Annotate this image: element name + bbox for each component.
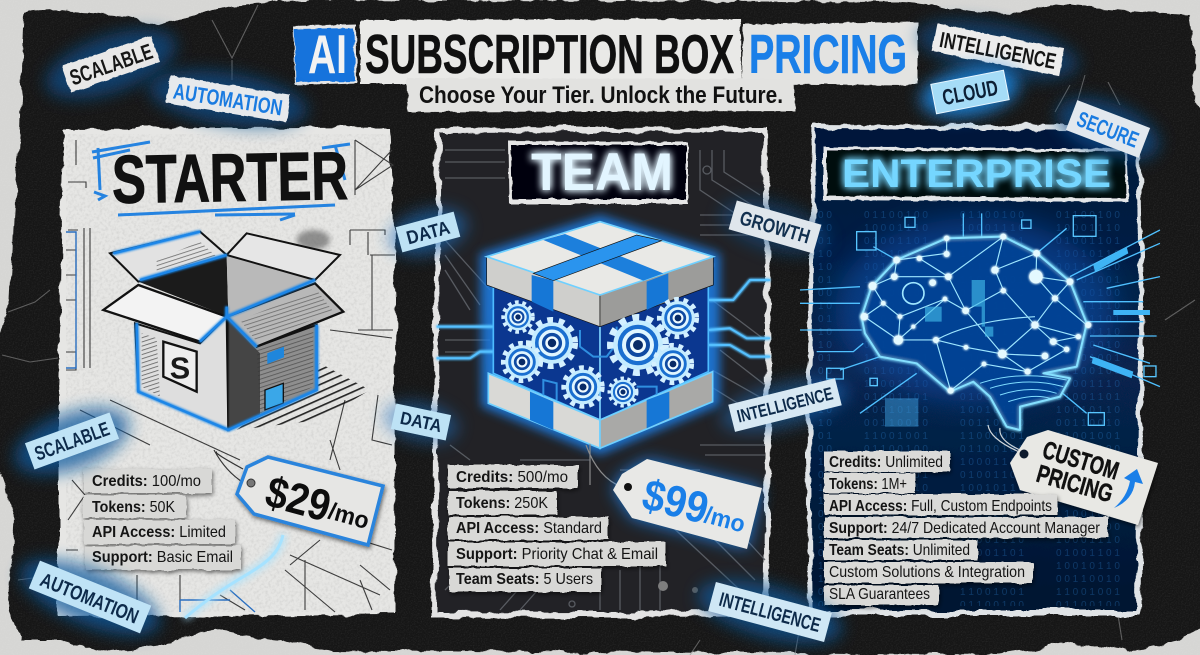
- price tag: custom pricing: [988, 425, 1158, 525]
- floating keyword: INTELLIGENCE lower: [692, 568, 848, 655]
- panel: enterprise: [800, 124, 1160, 616]
- floating keyword: GROWTH: [715, 188, 835, 266]
- floating keyword: GROWTH: GROWTH: [737, 207, 812, 248]
- title banner: [293, 19, 918, 112]
- binary rain background: [818, 206, 1134, 606]
- price tag: custom pricing: CUSTOM: [1039, 436, 1122, 486]
- box body: [493, 285, 708, 420]
- team feature list: Credits: 500/mo: [456, 469, 568, 486]
- team circuit board lines: [445, 150, 765, 610]
- team feature list: Team Seats: 5 Users: [456, 571, 593, 588]
- floating keyword: SCALABLE top: SCALABLE: [66, 39, 156, 90]
- floating keyword: DATA upper: DATA: [404, 218, 453, 249]
- icon: open sketched box: [103, 230, 370, 430]
- enterprise paper edge: [806, 124, 1144, 616]
- arrow: upward blue: [1114, 469, 1143, 508]
- floating keyword: SECURE: SECURE: [1073, 106, 1142, 153]
- heading: STARTER: [92, 138, 350, 220]
- box left wall: [135, 317, 228, 430]
- starter feature list: Credits: 100/mo: [92, 473, 201, 490]
- title: AI: AI: [308, 23, 347, 85]
- team feature list: Support: Priority Chat & Email: [456, 546, 658, 563]
- floating keyword: INTELLIGENCE middle: INTELLIGENCE: [735, 383, 835, 427]
- enterprise feature list: Custom Solutions & Integration: [829, 564, 1025, 581]
- title: SUBSCRIPTION BOX: SUBSCRIPTION BOX: [365, 23, 734, 85]
- starter feature list: Tokens: 50K: [92, 499, 175, 516]
- heading: ENTERPRISE: ENTERPRISE: [842, 152, 1111, 196]
- floating keyword: INTELLIGENCE middle: [716, 368, 854, 442]
- enterprise navy panel: [811, 129, 1139, 610]
- heading: ENTERPRISE: [823, 147, 1129, 202]
- box S label: [163, 342, 197, 392]
- enterprise feature list: Support: 24/7 Dedicated Account Manager: [829, 520, 1101, 537]
- enterprise feature list: SLA Guarantees: [829, 586, 930, 603]
- starter paper: [58, 127, 396, 617]
- brain outline: [862, 237, 1087, 430]
- floating keyword: DATA lower: DATA: [398, 408, 444, 436]
- enterprise feature list: API Access: Full, Custom Endpoints: [829, 498, 1052, 515]
- brain network links: [864, 237, 1087, 391]
- box blue accents: [265, 383, 283, 410]
- floating keyword: CLOUD: [916, 59, 1024, 125]
- floating keyword: INTELLIGENCE lower: INTELLIGENCE: [717, 589, 823, 637]
- starter feature list: API Access: Limited: [92, 524, 226, 541]
- team feature list: Tokens: 250K: [456, 495, 548, 512]
- enterprise feature list: Credits: Unlimited: [829, 454, 943, 471]
- brain nodes: [861, 234, 1091, 394]
- starter paper texture: [66, 134, 390, 612]
- team feature list: [448, 465, 666, 592]
- title: PRICING: PRICING: [749, 23, 907, 85]
- box interior: [138, 255, 228, 317]
- floating keyword: DATA upper: [384, 200, 472, 264]
- box tray: [488, 373, 600, 448]
- floating keyword: AUTOMATION lower: AUTOMATION: [37, 569, 142, 629]
- box S label: S: [170, 351, 190, 385]
- floating keyword: SCALABLE top: [38, 15, 184, 113]
- floating keyword: INTELLIGENCE top: INTELLIGENCE: [938, 27, 1058, 74]
- team feature list: API Access: Standard: [456, 520, 602, 537]
- light streak: [185, 535, 283, 618]
- data lines: [437, 280, 770, 358]
- box gears: [504, 300, 696, 405]
- price tag: $99/mo: /mo: [701, 502, 748, 538]
- price tag: $99/mo: [586, 444, 762, 549]
- price tag: $29/mo: [214, 450, 383, 545]
- price tag: $29/mo: $29: [260, 467, 336, 531]
- enterprise feature list: [824, 451, 1108, 605]
- box back flaps: [110, 232, 227, 282]
- floating keyword: AUTOMATION top: [145, 61, 311, 137]
- starter feature list: Support: Basic Email: [92, 549, 233, 566]
- box right wall: [228, 318, 317, 430]
- box lid: [487, 257, 600, 327]
- panel: starter: [58, 127, 396, 618]
- icon: glowing box with gears: [437, 215, 770, 455]
- price tag: $99/mo: $99: [638, 470, 713, 534]
- box glow: [480, 215, 720, 455]
- floating keyword: AUTOMATION top: AUTOMATION: [172, 79, 284, 120]
- data streams: [800, 213, 1160, 413]
- enterprise feature list: Team Seats: Unlimited: [829, 542, 970, 559]
- title: SUBSCRIPTION BOX: [360, 19, 742, 85]
- brain glow: [835, 218, 1115, 402]
- floating keyword: INTELLIGENCE top: [913, 9, 1083, 91]
- enterprise feature list: Tokens: 1M+: [829, 476, 907, 493]
- heading: TEAM: TEAM: [531, 143, 673, 202]
- panel: team: [432, 127, 771, 618]
- heading: STARTER: STARTER: [111, 138, 349, 218]
- box ground shadow: [237, 363, 370, 430]
- subtitle: Choose Your Tier. Unlock the Future.: [419, 82, 783, 109]
- floating keyword: AUTOMATION lower: [11, 543, 169, 651]
- floating keyword: SECURE: [1048, 85, 1168, 173]
- box front flaps: [103, 285, 227, 342]
- floating keyword: SCALABLE lower: [6, 394, 138, 488]
- floating keyword: DATA lower: [380, 395, 462, 449]
- price tag: custom pricing: PRICING: [1033, 460, 1116, 508]
- starter blueprint sketch lines: [66, 140, 395, 612]
- team dark panel: [437, 132, 765, 612]
- price tag: $29/mo: /mo: [325, 498, 372, 535]
- team paper edge: [432, 127, 771, 618]
- starter feature list: [83, 469, 241, 570]
- cerebellum lines: [980, 376, 1067, 402]
- icon: neural network brain: [800, 213, 1160, 430]
- floating keyword: CLOUD: CLOUD: [940, 75, 1000, 110]
- floating keyword: SCALABLE lower: SCALABLE: [32, 418, 113, 466]
